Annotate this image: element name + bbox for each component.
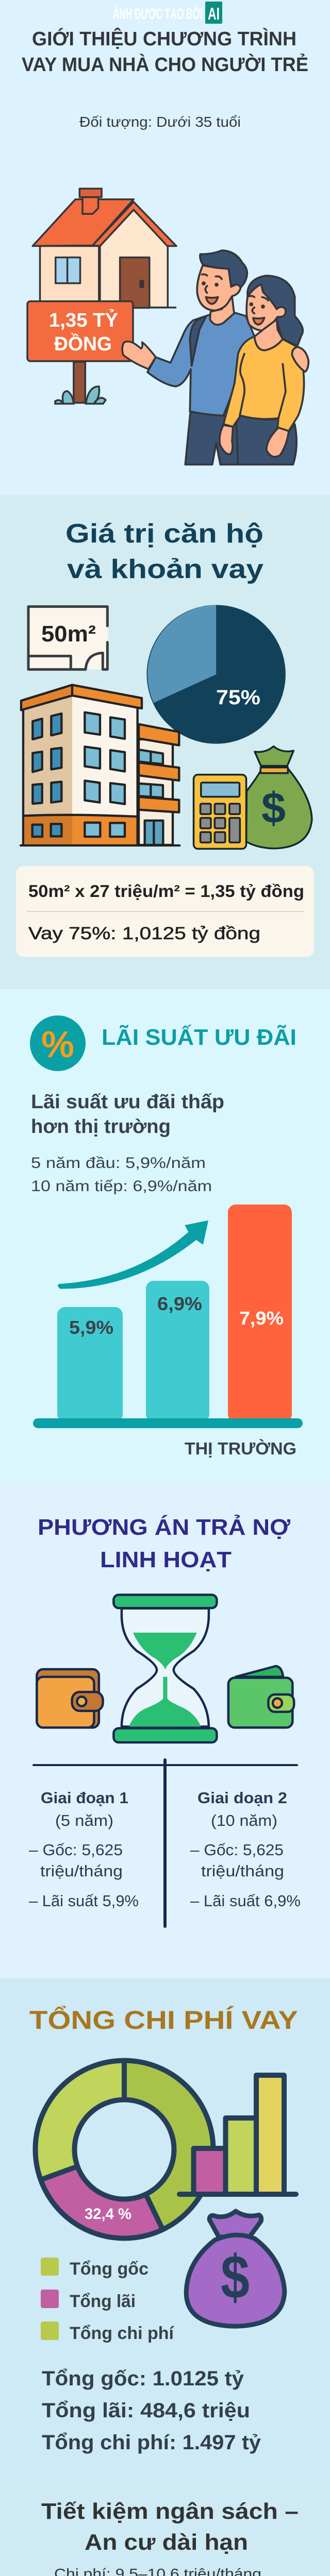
icon: green wallet <box>228 1666 294 1727</box>
icon: money bag and calculator: $ <box>261 784 286 832</box>
calculation box: 50m² x 27 triệu/m² = 1,35 tỷ đồng <box>28 882 304 901</box>
rate details <box>31 1155 212 1195</box>
heading: LINH HOẠT <box>100 1547 232 1572</box>
column: stage 1 <box>29 1789 139 1910</box>
heading: LÃI SUẤT ƯU ĐÃI <box>102 1024 296 1050</box>
icon: purple money bag <box>186 2211 285 2326</box>
floor plan 50m2 <box>28 606 108 669</box>
legend: Tổng lãi <box>70 2292 136 2311</box>
title: GIỚI THIỆU CHƯƠNG TRÌNH <box>32 27 296 50</box>
icon: hourglass <box>113 1595 217 1742</box>
panel: total loan cost <box>0 1978 330 2473</box>
panel: apartment value and loan <box>0 495 330 989</box>
heading <box>65 519 263 584</box>
heading <box>38 1514 290 1572</box>
totals: Tổng lãi: 484,6 triệu <box>42 2399 250 2422</box>
calculation box: Vay 75%: 1,0125 tỷ đồng <box>28 924 260 943</box>
column: stage 1: (5 năm) <box>55 1811 113 1829</box>
illustration: young couple <box>122 250 308 465</box>
icon: percent badge <box>30 1015 86 1071</box>
rate details: 10 năm tiếp: 6,9%/năm <box>31 1178 212 1195</box>
divider <box>32 1758 298 1928</box>
column: stage 1: – Lãi suất 5,9% <box>29 1892 139 1910</box>
subheading <box>31 1091 224 1138</box>
floor plan 50m2: 50m² <box>41 621 96 647</box>
bar icon <box>179 2075 296 2194</box>
column: stage 2: (10 năm) <box>211 1811 277 1829</box>
bar chart: THỊ TRƯỜNG <box>185 1439 296 1458</box>
bar chart: 7,9% <box>239 1308 284 1329</box>
panel: flexible repayment <box>0 1484 330 1978</box>
price sign: 1,35 TỶ <box>49 309 118 331</box>
legend <box>41 2258 175 2343</box>
heading: TỔNG CHI PHÍ VAY <box>29 2005 298 2035</box>
price sign <box>27 301 133 404</box>
donut chart: 32,4 % <box>85 2206 131 2223</box>
calculation box <box>16 866 314 957</box>
icon: orange wallet <box>37 1669 103 1727</box>
column: stage 2 <box>190 1789 301 1910</box>
subtitle: audience: Đối tượng: Dưới 35 tuổi <box>79 114 241 130</box>
panel: preferential interest rate <box>0 989 330 1484</box>
bar chart: 5,9% <box>69 1317 113 1338</box>
column: stage 2: triệu/tháng <box>201 1862 284 1880</box>
icon: percent badge: % <box>41 1024 74 1065</box>
heading: Giá trị căn hộ <box>65 519 263 549</box>
column: stage 1: – Gốc: 5,625 <box>29 1841 123 1859</box>
heading: Tiết kiệm ngân sách – <box>41 2499 299 2524</box>
arrow <box>58 1221 208 1289</box>
column: stage 2: – Gốc: 5,625 <box>190 1841 284 1859</box>
totals <box>42 2367 261 2454</box>
legend: Tổng chi phí <box>70 2324 175 2343</box>
column: stage 1: Giai đoạn 1 <box>41 1789 128 1807</box>
pie chart 75% <box>146 605 286 744</box>
heading: PHƯƠNG ÁN TRẢ NỢ <box>38 1514 290 1540</box>
rate details: 5 năm đầu: 5,9%/năm <box>31 1155 206 1172</box>
watermark <box>113 2 222 24</box>
column: stage 1: triệu/tháng <box>40 1862 123 1880</box>
watermark: ẢNH ĐƯỢC TẠO BỞI <box>113 5 203 23</box>
illustration: apartment building <box>21 685 179 845</box>
illustration: house <box>32 189 176 308</box>
price sign: ĐỒNG <box>54 332 112 355</box>
totals: Tổng gốc: 1.0125 tỷ <box>42 2367 244 2390</box>
subheading: hơn thị trường <box>31 1116 171 1138</box>
heading <box>41 2499 299 2555</box>
column: stage 2: – Lãi suất 6,9% <box>190 1892 301 1910</box>
bar chart: 6,9% <box>157 1293 202 1314</box>
bar chart <box>33 1205 303 1458</box>
legend: Tổng gốc <box>70 2259 148 2279</box>
donut chart <box>35 2058 213 2238</box>
totals: Tổng chi phí: 1.497 tỷ <box>42 2431 261 2454</box>
heading: và khoản vay <box>67 554 263 584</box>
icon: purple money bag: $ <box>221 2243 250 2312</box>
title <box>22 27 308 76</box>
panel: budget saving and long-term housing <box>0 2473 330 2576</box>
column: stage 2: Giai doạn 2 <box>197 1789 287 1807</box>
subheading: Lãi suất ưu đãi thấp <box>31 1091 224 1113</box>
panel: introduction <box>0 0 330 495</box>
icon: money bag and calculator <box>194 747 312 849</box>
heading: An cư dài hạn <box>85 2530 248 2555</box>
pie chart 75%: 75% <box>216 686 260 709</box>
watermark: AI <box>208 4 220 23</box>
title: VAY MUA NHÀ CHO NGƯỜI TRẺ <box>22 53 308 76</box>
